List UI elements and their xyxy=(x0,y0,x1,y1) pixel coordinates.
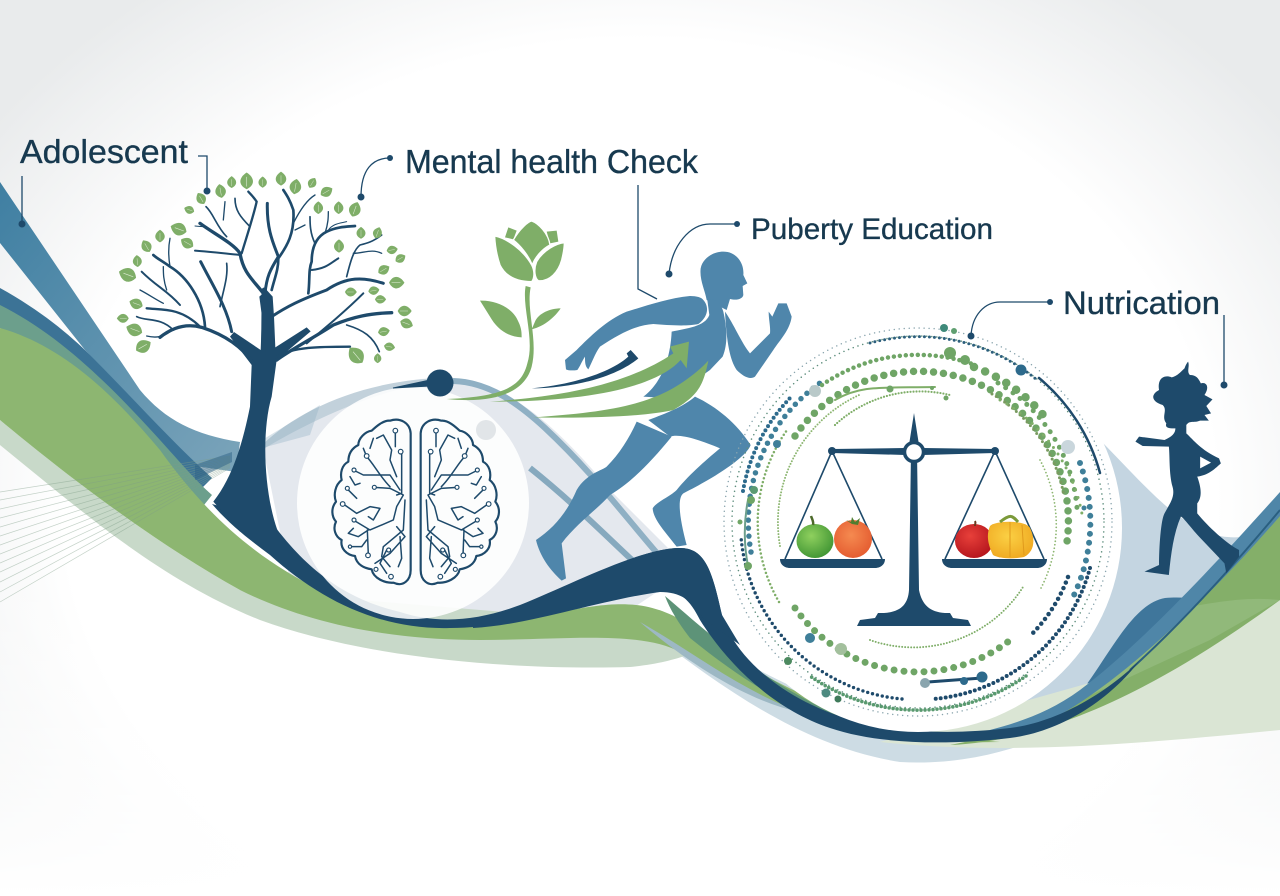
runner front leg xyxy=(648,397,751,547)
tree leaves xyxy=(117,172,415,368)
blue arc lines xyxy=(453,381,656,552)
navy wave xyxy=(212,504,1140,742)
dark blue band xyxy=(0,288,212,490)
child runner xyxy=(1135,362,1239,575)
label: Mental health Check xyxy=(358,143,698,299)
runner torso xyxy=(643,299,726,398)
wave layers xyxy=(0,182,1280,763)
label: Nutrication: Nutrication xyxy=(1063,285,1220,321)
brain left hemisphere xyxy=(332,420,411,584)
flower right petal xyxy=(535,243,564,281)
red apple xyxy=(955,521,993,558)
green wave right xyxy=(950,508,1280,745)
navy node with pointer xyxy=(393,370,454,396)
scale ring xyxy=(904,442,924,462)
flower stem xyxy=(447,286,534,400)
orange tomato xyxy=(834,517,872,558)
large green wave left xyxy=(0,328,1000,742)
flower left leaf xyxy=(480,301,522,337)
dotted rings xyxy=(724,324,1112,716)
fan lines left xyxy=(0,456,230,602)
flower left petal xyxy=(495,236,534,282)
muted green band xyxy=(0,305,212,510)
blue hill xyxy=(1020,597,1215,735)
scale beam xyxy=(832,448,995,455)
small grey dot on brain circle xyxy=(476,420,496,440)
runner back arm xyxy=(565,296,707,370)
dark edge line right xyxy=(1130,510,1280,670)
blue right edge xyxy=(990,492,1280,736)
pale region behind brain xyxy=(263,378,690,630)
green swoosh upper xyxy=(490,342,689,402)
green swoosh lower xyxy=(533,361,708,418)
scale strings xyxy=(785,451,1044,559)
navy streak xyxy=(532,350,638,388)
green apple xyxy=(796,516,834,558)
yellow pepper xyxy=(988,516,1033,558)
pale green lower right band xyxy=(880,590,1280,748)
label: Nutrication xyxy=(968,285,1228,388)
label: Puberty Education xyxy=(666,213,993,278)
brain right hemisphere xyxy=(421,420,499,584)
tree xyxy=(117,172,415,532)
scale xyxy=(780,413,1047,626)
steel blue band xyxy=(0,182,240,472)
label: Puberty Education: Puberty Education xyxy=(751,213,993,246)
label: Adolescent: Adolescent xyxy=(20,133,188,170)
tree branches xyxy=(137,190,392,363)
right pan xyxy=(942,559,1047,568)
label: Mental health Check: Mental health Check xyxy=(405,143,698,180)
brain circle background xyxy=(297,387,529,619)
big circle background xyxy=(714,324,1122,732)
grey-blue strip under hump xyxy=(640,622,800,712)
tree trunk xyxy=(213,290,311,532)
flower centre petal xyxy=(513,221,550,265)
runner head xyxy=(700,252,747,310)
brain xyxy=(332,420,499,584)
runner front arm xyxy=(725,303,792,378)
pale blue lower band xyxy=(620,610,1040,763)
left pan xyxy=(780,559,885,568)
flower back petals xyxy=(505,227,558,243)
navy hump front xyxy=(473,548,740,645)
accent dots xyxy=(738,324,1086,702)
pale hill behind child runner xyxy=(1000,440,1250,720)
pale green band left xyxy=(0,420,720,667)
runner back leg xyxy=(536,422,672,581)
label: Adolescent xyxy=(18,133,210,228)
teal green strip under hump xyxy=(665,596,870,730)
scale column xyxy=(857,413,971,626)
runner xyxy=(490,252,792,581)
flower right leaf xyxy=(532,308,561,329)
flower xyxy=(447,221,564,400)
